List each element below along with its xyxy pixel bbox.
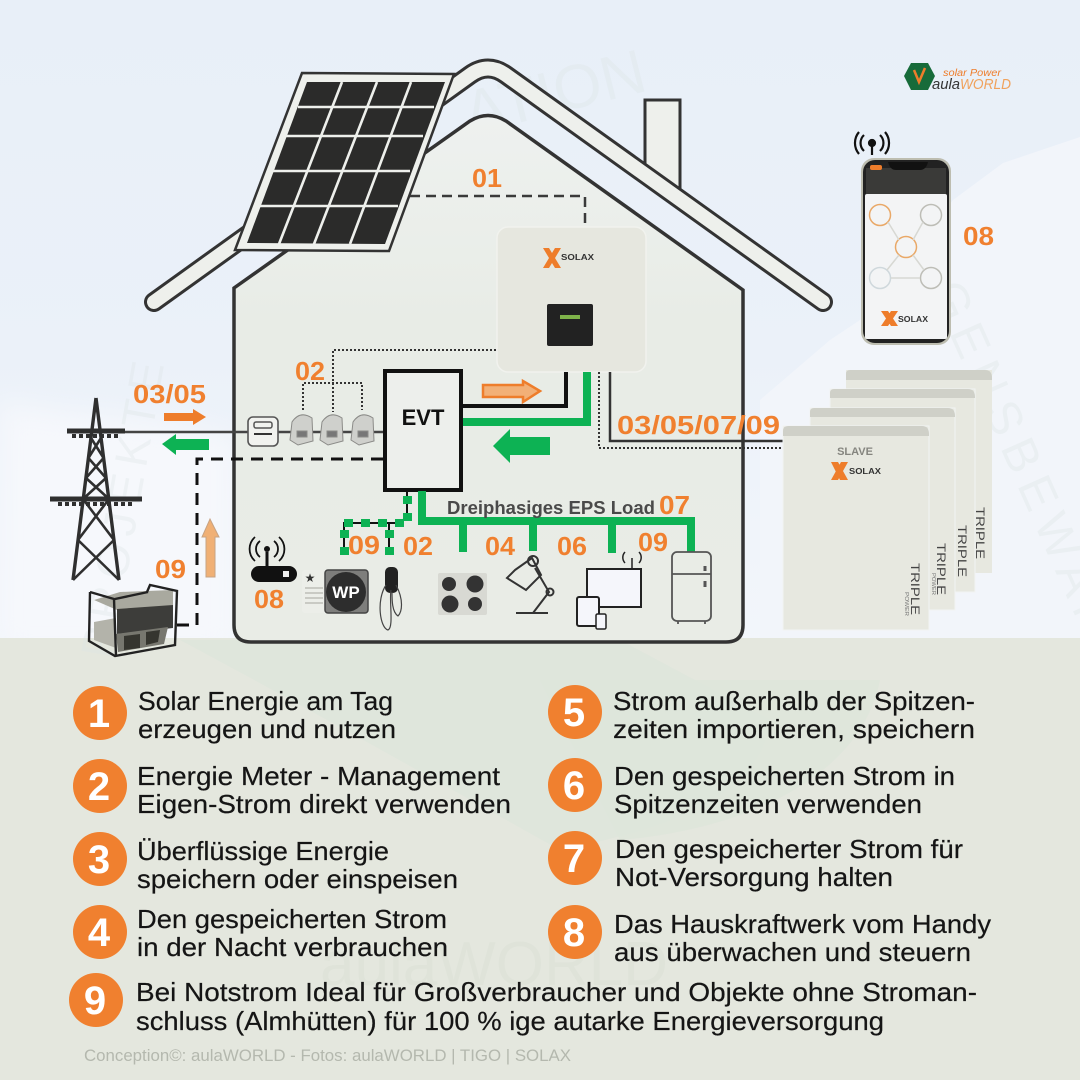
list item 8: 8 (563, 911, 585, 955)
list item 3: Überflüssige Energie (137, 836, 389, 866)
smartphone (855, 132, 951, 345)
EVT box (385, 371, 461, 490)
list item 2: Energie Meter - Management (137, 761, 501, 791)
list item 4: in der Nacht verbrauchen (137, 932, 448, 962)
grid meter (248, 417, 278, 446)
grid line (125, 431, 383, 433)
watermark text: aulaWORLD (320, 930, 668, 999)
battery 1: TRIPLE (908, 563, 922, 615)
current transformers (290, 415, 374, 445)
battery 3: TRIPLE (955, 525, 969, 577)
battery 3 (830, 389, 975, 592)
orange arrow grid (164, 409, 206, 425)
battery 1: POWER (903, 592, 909, 616)
battery lines (599, 372, 787, 448)
list item 6: Spitzenzeiten verwenden (614, 789, 922, 819)
background meadow (0, 638, 1080, 1080)
orange arrow inverter (483, 381, 540, 402)
list item 4: Den gespeicherten Strom (137, 904, 447, 934)
label 03/05: 03/05 (133, 379, 206, 409)
list item 7: Not-Versorgung halten (615, 862, 893, 892)
inverter logo (543, 248, 594, 268)
list item 4 (73, 904, 448, 962)
list item 2: Eigen-Strom direkt verwenden (137, 789, 511, 819)
list item 8 (548, 905, 991, 967)
roof band (154, 68, 823, 302)
list item 2: 2 (88, 765, 110, 809)
inverter display (547, 304, 593, 346)
logo aulaWORLD: aula (932, 76, 960, 93)
list item 1: Solar Energie am Tag (138, 686, 393, 716)
background clouds (0, 137, 1080, 650)
list item 1: 1 (88, 692, 110, 736)
battery 1: SLAVE (837, 446, 873, 458)
label 09 generator: 09 (155, 554, 186, 584)
desk lamp (507, 556, 554, 613)
computer devices (577, 552, 641, 629)
generator dashed line (172, 459, 383, 625)
list item 5: zeiten importieren, speichern (613, 714, 975, 744)
list item 8: Das Hauskraftwerk vom Handy (614, 909, 991, 939)
generator (89, 585, 177, 656)
batteries (783, 370, 992, 630)
list item 3: speichern oder einspeisen (137, 864, 458, 894)
battery 2 (810, 408, 955, 610)
battery 4 (846, 370, 992, 573)
fridge (672, 552, 711, 624)
list item 5 (548, 685, 975, 744)
inverter logo: SOLAX (561, 252, 594, 262)
list item 7: Den gespeicherter Strom für (615, 834, 963, 864)
battery 1: SOLAX (849, 467, 882, 476)
solar panel (235, 73, 454, 251)
logo aulaWORLD (904, 63, 1011, 93)
list item 4: 4 (88, 911, 111, 955)
list item 1 (73, 686, 396, 744)
dashed green line with squares (340, 491, 412, 555)
list item 9 (69, 973, 977, 1036)
list item 3 (73, 832, 458, 894)
watermark text: PROJEKTE (71, 357, 174, 662)
power tower (50, 398, 142, 580)
inverter (497, 227, 646, 372)
list item 5: Strom außerhalb der Spitzen- (613, 686, 975, 716)
logo aulaWORLD: solar Power (943, 68, 1002, 79)
list item 7: 7 (563, 837, 585, 881)
label 09 heat pump: 09 (348, 530, 380, 560)
green arrow grid (162, 434, 209, 455)
list item 2 (73, 759, 511, 819)
heat pump (302, 570, 368, 613)
heat pump: ★ (305, 571, 315, 585)
label EPS load: Dreiphasiges EPS Load (447, 498, 655, 518)
label 06: 06 (557, 531, 587, 561)
list item 6: Den gespeicherten Strom in (614, 761, 955, 791)
EVT box: EVT (402, 405, 445, 430)
label 08 phone: 08 (963, 221, 994, 251)
logo aulaWORLD: WORLD (960, 76, 1011, 93)
label 08 router: 08 (254, 584, 284, 614)
house body (234, 116, 743, 642)
battery 4: TRIPLE (973, 507, 987, 559)
list item 3: 3 (88, 838, 110, 882)
battery 2: POWER (930, 573, 936, 595)
list item 9: schluss (Almhütten) für 100 % ige autarke Energieversorgung (136, 1006, 884, 1036)
wifi icon (855, 132, 889, 155)
list item 1: erzeugen und nutzen (138, 714, 396, 744)
label 07: 07 (659, 490, 690, 520)
battery 2: TRIPLE (934, 543, 948, 595)
list item 6 (548, 758, 955, 819)
EV charger (380, 567, 402, 630)
list item 9: 9 (84, 979, 106, 1023)
list item 6: 6 (563, 764, 585, 808)
chimney (645, 100, 680, 200)
label 02 charger: 02 (403, 531, 433, 561)
green line inverter to EVT (463, 372, 587, 422)
list item 5: 5 (563, 691, 585, 735)
watermark text: ATION (457, 37, 653, 149)
list item 9: Bei Notstrom Ideal für Großverbraucher und Objekte ohne Stroman- (136, 977, 977, 1007)
label 03/05/07/09: 03/05/07/09 (617, 410, 780, 440)
smartphone: SOLAX (898, 315, 929, 324)
green arrow inverter (493, 429, 550, 463)
label 04: 04 (485, 531, 516, 561)
heat pump: WP (332, 583, 360, 602)
green EPS bus (422, 491, 691, 553)
label 09 fridge: 09 (638, 527, 668, 557)
footer credit: Conception©: aulaWORLD - Fotos: aulaWORLD | TIGO | SOLAX (84, 1046, 571, 1065)
dotted line inverter to meters (303, 350, 496, 412)
list item 7 (548, 831, 963, 892)
black line inverter to EVT (463, 372, 566, 406)
router (250, 537, 297, 582)
cooktop (438, 573, 487, 615)
peach arrow up (202, 519, 219, 577)
list item 8: aus überwachen und steuern (614, 937, 971, 967)
label 01: 01 (472, 163, 502, 193)
battery 1 (783, 426, 929, 630)
label 02 meters: 02 (295, 356, 325, 386)
background sky (0, 0, 1080, 650)
line 01: panel to inverter (410, 196, 585, 226)
